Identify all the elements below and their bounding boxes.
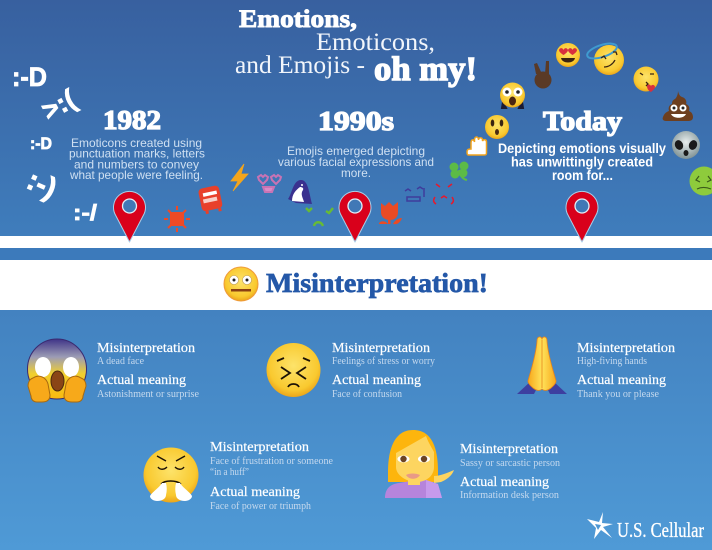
- icon: confounded face: [266, 343, 320, 397]
- item: screaming face: [28, 339, 200, 402]
- icon: triumph face: [144, 448, 198, 502]
- item: information desk person: Information desk person: [460, 490, 559, 501]
- item: triumph face: Face of power or triumph: [210, 501, 311, 512]
- section: 1990s: [278, 106, 434, 180]
- title: [235, 6, 477, 88]
- icon: bus: [198, 185, 224, 215]
- icon: surprised face: [485, 115, 509, 139]
- icon: pixel red angry face: [434, 184, 453, 204]
- icon: pixel green face: [306, 208, 333, 226]
- item: praying hands: Misinterpretation: [577, 341, 675, 356]
- item: confounded face: Feelings of stress or worry: [332, 356, 435, 367]
- item: confounded face: Face of confusion: [332, 389, 402, 400]
- section: Today: has unwittingly created: [511, 154, 653, 170]
- section: 1982: 1982: [103, 105, 161, 135]
- icon: screaming face: [28, 339, 86, 402]
- panel: misinterpretation banner: [0, 260, 712, 310]
- item: praying hands: [517, 337, 675, 400]
- title: and Emojis -: [235, 52, 365, 79]
- emoticons column: :-): [22, 164, 61, 205]
- icon: pixel blue face: [405, 187, 424, 201]
- icon: heart eyes face: [556, 43, 580, 67]
- item: confounded face: [266, 341, 435, 400]
- item: confounded face: Actual meaning: [332, 373, 421, 388]
- title: oh my!: [374, 51, 477, 88]
- section: 1982: Emoticons created using: [71, 136, 202, 150]
- section: 1990s: various facial expressions and: [278, 155, 434, 169]
- title: Emoticons,: [316, 29, 435, 56]
- item: triumph face: Actual meaning: [210, 485, 300, 500]
- heading: Misinterpretation!: Misinterpretation!: [266, 268, 488, 298]
- section: Today: room for...: [552, 168, 613, 183]
- icon: nauseated green face: [690, 166, 712, 196]
- section: 1990s: 1990s: [318, 106, 394, 136]
- title: Emotions,: [239, 6, 357, 33]
- icon: map pin 1982: [113, 191, 146, 242]
- icon: halo face: [585, 41, 624, 75]
- icon: neutral face: [224, 267, 258, 301]
- section: Today: Today: [543, 106, 623, 136]
- icon: praying hands: [517, 337, 567, 394]
- icon: tulip: [379, 202, 402, 224]
- item: screaming face: Actual meaning: [97, 373, 186, 388]
- section: 1982: punctuation marks, letters: [69, 146, 205, 160]
- item: information desk person: Actual meaning: [460, 475, 549, 490]
- item: screaming face: Astonishment or surprise: [97, 389, 200, 400]
- blue divider strip: [0, 248, 712, 260]
- item: praying hands: High-fiving hands: [577, 356, 647, 367]
- item: triumph face: Face of frustration or someone: [210, 456, 334, 467]
- icon: fearful face: [500, 82, 525, 108]
- item: screaming face: A dead face: [97, 356, 145, 367]
- icon: information desk person: [385, 430, 454, 498]
- icon: penguin: [288, 180, 312, 204]
- item: screaming face: Misinterpretation: [97, 341, 195, 356]
- emoticons column: :-D: [30, 134, 52, 153]
- item: information desk person: [385, 430, 560, 501]
- section: 1982: and numbers to convey: [74, 158, 199, 172]
- item: triumph face: Misinterpretation: [210, 440, 309, 455]
- item: praying hands: Actual meaning: [577, 373, 666, 388]
- section: Today: Depicting emotions visually: [498, 141, 666, 156]
- icon: kissing face: [634, 66, 658, 92]
- logo: U.S. Cellular: [587, 512, 704, 542]
- section: 1990s: more.: [341, 166, 371, 180]
- section: Today: [498, 106, 666, 183]
- icon: peace hand: [534, 61, 552, 88]
- icon: map pin 1990s: [339, 191, 371, 242]
- item: information desk person: Sassy or sarcastic person: [460, 458, 560, 469]
- icon: poop: [663, 91, 693, 121]
- white timeline band: [0, 236, 712, 248]
- emoticons column: [12, 62, 97, 225]
- item: information desk person: Misinterpretation: [460, 442, 558, 457]
- icon: clover: [450, 162, 468, 180]
- section: 1990s: Emojis emerged depicting: [287, 144, 425, 158]
- icon: raised hand: [467, 137, 486, 155]
- panel: examples background: [0, 310, 712, 550]
- section: 1982: what people were feeling.: [69, 168, 203, 182]
- item: triumph face: “in a huff”: [210, 467, 249, 478]
- icon: pixel heart eyes face: [258, 175, 281, 192]
- item: praying hands: Thank you or please: [577, 389, 660, 400]
- emoticons column: :-D: [12, 62, 47, 92]
- icon: lightning bolt: [231, 164, 248, 191]
- section: 1982: [69, 105, 205, 182]
- panel: timeline background: [0, 0, 712, 236]
- icon: alien: [672, 131, 700, 159]
- emoticons column: >:(: [37, 84, 81, 126]
- item: confounded face: Misinterpretation: [332, 341, 430, 356]
- item: triumph face: [144, 440, 334, 512]
- emoticons column: :-/: [73, 200, 97, 225]
- icon: sun: [164, 206, 190, 232]
- icon: map pin Today: [566, 191, 598, 242]
